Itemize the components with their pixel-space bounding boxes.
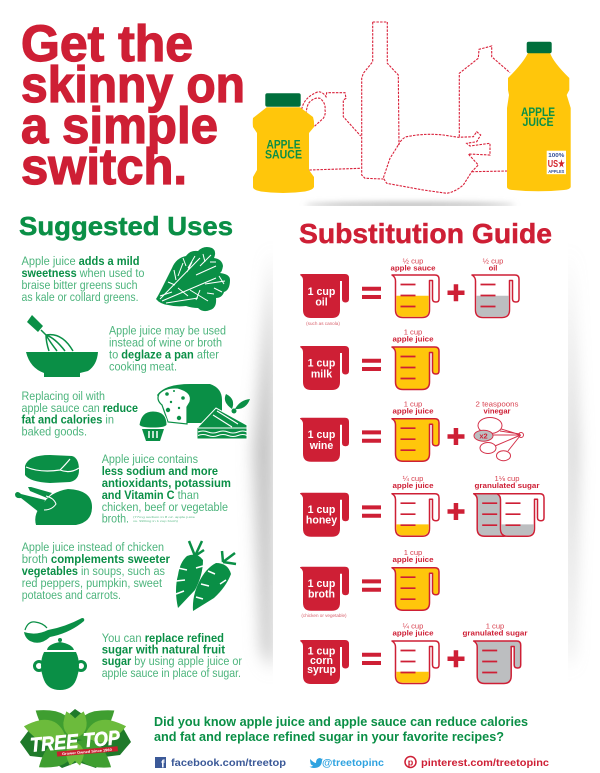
source cup: honey: 1 cup [308,504,336,516]
text: sugar by using apple juice or [102,654,242,668]
cup: apple juice [392,419,439,461]
row: 1 cup milk [300,327,439,390]
panel: substitution guide [254,206,577,684]
text: cooking meat. [109,359,177,373]
apple juice bottle: APPLE [521,107,555,119]
text: Apple juice instead of chicken [22,540,164,554]
text: Apple juice adds a mild [22,254,140,268]
row: 1 cup corn syrup: ¼ cup [403,622,423,631]
icon: measuring spoons [474,418,524,461]
social: facebook: f [161,758,165,770]
cup: quarter apple juice [392,641,439,684]
source cup: oil [300,274,349,318]
text [102,631,242,680]
use: complements sweeter vegetables [22,540,236,611]
social: pinterest: pinterest.com/treetopinc [421,757,549,769]
row: 1 cup honey: granulated sugar [474,481,540,490]
text: sugar with natural fruit [102,642,225,656]
source cup: wine [300,418,349,462]
icon: sugar spoon and bowl [24,618,86,690]
row: 1 cup broth: apple juice [392,555,434,564]
cup: half oil [472,275,519,318]
apple sauce jar: APPLE [266,139,301,151]
footnote: (77mg sodium in 8 oz. apple juice [133,515,195,519]
wordmark: Grower Owned Since 1960 [62,748,112,756]
text: potatoes and carrots. [22,588,121,602]
social: twitter: @treetopinc [322,757,384,769]
row: 1 cup honey: apple juice [392,481,434,490]
cup: apple juice [392,568,439,610]
text: braise bitter greens such [22,278,138,292]
badge: 100% USA apples: APPLES [548,169,564,174]
source cup: oil: 1 cup [308,286,336,298]
title: skinny on [21,56,245,113]
source cup: milk: milk [311,368,332,380]
source cup: corn syrup: corn [310,655,333,667]
badge: 100% USA apples: 100% [548,153,564,159]
text [109,324,226,373]
source cup: wine: 1 cup [308,429,336,441]
use: baked goods [22,384,250,441]
row: 1 cup wine [300,399,524,462]
source cup: corn syrup [300,640,349,684]
row: 1 cup oil: (such as canola) [306,321,340,326]
text: sweetness when used to [22,266,145,280]
source cup: corn syrup: 1 cup [308,646,336,658]
text: baked goods. [22,424,87,438]
text [22,540,170,602]
badge: 100% USA apples: US★ [548,159,565,170]
text: apple sauce in place of sugar. [102,666,241,680]
heading: suggested uses: Suggested Uses [19,211,233,241]
source cup: oil: oil [315,296,328,308]
row: 1 cup corn syrup: apple juice [392,629,434,638]
source cup: milk: 1 cup [308,358,336,370]
text: fat and calories in [22,412,114,426]
row: 1 cup honey: ¼ cup [403,474,423,483]
row: 1 cup wine: 2 teaspoons [476,399,519,408]
apple juice bottle [507,42,571,191]
row: 1 cup oil [300,256,519,326]
text: broth. [102,512,129,526]
source cup: corn syrup: syrup [307,664,336,676]
text: broth complements sweeter [22,552,170,566]
title: a simple [21,97,218,154]
row: 1 cup milk: 1 cup [404,327,422,336]
text: instead of wine or broth [109,336,222,350]
title: switch. [21,138,187,195]
source cup: honey: honey [306,514,337,526]
row: 1 cup wine: 1 cup [404,399,422,408]
text: as kale or collard greens. [22,290,138,304]
text: Apple juice contains [102,452,198,466]
social: pinterest: p [408,758,414,768]
text: apple sauce can reduce [22,401,138,415]
text: to deglaze a pan after [109,347,219,361]
row: 1 cup honey: 1⅛ cup [495,474,519,483]
footer question: Did you know apple juice and apple sauce can reduce calories [154,715,528,729]
source cup: milk [300,346,349,390]
text: Replacing oil with [22,389,105,403]
cup: granulated sugar [474,641,521,684]
icon: whisk and bowl [26,315,98,377]
use: less sodium [15,452,231,526]
badge: 100% USA apples [547,151,566,174]
row: 1 cup honey [300,474,544,537]
text: antioxidants, potassium [102,476,231,490]
icon: bread, muffin and cake [139,384,250,441]
icon: steak and chicken [15,455,92,525]
source cup: wine: wine [309,440,333,452]
source cup: broth: broth [308,589,335,601]
title: Get the [21,15,193,72]
row: 1 cup oil: oil [489,263,497,272]
logo: Tree Top [20,700,131,773]
title [21,15,245,195]
text [22,254,145,304]
illustration: dashed outlines of oil, wine, vinegar and turkey [302,22,510,193]
row: 1 cup broth: 1 cup [404,548,422,557]
wordmark: TREE TOP [29,727,121,757]
row: 1 cup milk: apple juice [392,334,434,343]
icon: collard greens [156,247,230,311]
cups: granulated sugar [474,494,544,536]
panel shadow [254,250,577,670]
row: 1 cup corn syrup [300,622,528,684]
row: 1 cup wine: vinegar [483,406,511,415]
use: deglaze a pan [26,315,226,377]
text: and Vitamin C than [102,488,199,502]
social: facebook: facebook.com/treetop [171,757,286,769]
footer question [154,715,528,744]
footnote: vs. 930mg in 1 cup broth) [133,519,178,523]
apple sauce jar: SAUCE [265,149,302,161]
row: 1 cup broth: (chicken or vegetable) [301,613,347,618]
cup: quarter apple juice [392,494,439,536]
row: 1 cup oil: ½ cup [483,256,503,265]
text: Apple juice may be used [109,324,226,338]
ground shadow [305,202,515,208]
row: 1 cup corn syrup: granulated sugar [462,629,528,638]
row: 1 cup oil: apple sauce [390,263,436,272]
text: vegetables in soups, such as [22,564,165,578]
text [22,389,138,438]
text: less sodium and more [102,464,218,478]
cup: apple juice [392,347,439,390]
use: replace refined sugar [24,618,242,690]
footer question: and fat and replace refined sugar in your favorite recipes? [154,730,504,744]
icon: carrots [176,541,236,611]
cup: half apple sauce [392,275,439,318]
text: chicken, beef or vegetable [102,500,228,514]
footnote [133,515,195,523]
apple sauce jar [253,93,314,193]
text: red peppers, pumpkin, sweet [22,576,163,590]
row: 1 cup broth [300,548,439,618]
text [102,452,231,526]
source cup: honey [300,493,349,537]
source cup: broth: 1 cup [308,578,336,590]
row: 1 cup corn syrup: 1 cup [486,622,504,631]
text: You can replace refined [102,631,224,645]
heading: substitution guide: Substitution Guide [299,218,552,249]
row: 1 cup wine: apple juice [392,406,434,415]
icon: measuring spoons: x2 [479,432,488,440]
source cup: broth [300,567,349,611]
use: braise bitter greens [22,247,230,311]
row: 1 cup oil: ½ cup [403,256,423,265]
apple juice bottle: JUICE [522,117,554,129]
